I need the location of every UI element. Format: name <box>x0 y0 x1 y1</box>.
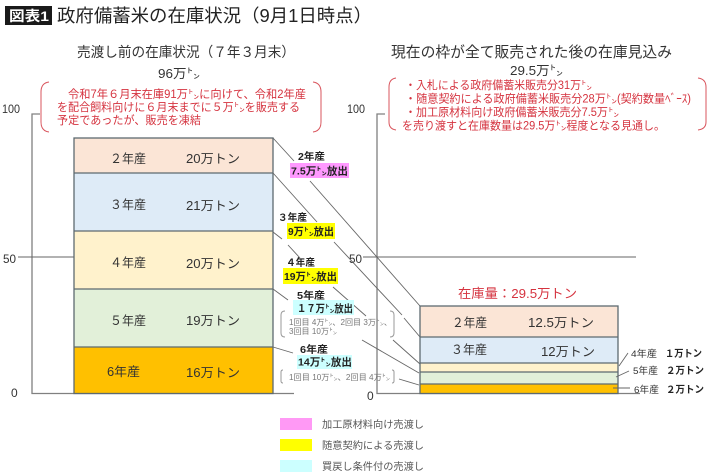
note: 6年産 release rounds <box>281 370 394 383</box>
callout: right note: ・加工原材料向け政府備蓄米販売分7.5万㌧ <box>405 105 619 119</box>
label: 5年産 release: 5年産 <box>297 289 325 302</box>
right side labels: １万トン <box>665 348 702 360</box>
callout: left note: 予定であったが、販売を凍結 <box>57 113 201 127</box>
right side labels: ２万トン <box>666 365 704 377</box>
right side labels: 4年産 <box>631 348 658 360</box>
right axis: 50 <box>349 252 362 266</box>
note: 5年産 release rounds: 1回目 4万㌧、2回目 3万㌧、 <box>289 318 392 327</box>
legend: 加工原材料向け売渡し <box>322 418 424 431</box>
stacked bar: before sale: ３年産 <box>110 198 146 212</box>
heading: right chart: 現在の枠が全て販売された後の在庫見込み <box>391 44 672 61</box>
label: 3年産 release: 9万㌧放出 <box>288 225 334 238</box>
stacked bar: before sale <box>74 138 273 394</box>
stacked bar: after sale: ２年産 <box>452 316 487 330</box>
right side labels: 5年産 <box>633 365 659 377</box>
left axis: 0 <box>11 386 18 400</box>
note: 5年産 release rounds <box>281 311 394 337</box>
callout: left note: を配合飼料向けに６月末までに５万㌧を販売する <box>57 100 300 114</box>
heading: left chart: 売渡し前の在庫状況（７年３月末） <box>77 44 295 60</box>
legend: 買戻し条件付の売渡し <box>322 460 424 473</box>
heading: right chart: 29.5万㌧ <box>510 63 563 78</box>
callout: right note: ・随意契約による政府備蓄米販売分28万㌧(契約数量ﾍﾞｰｽ) <box>405 92 691 106</box>
label: 4年産 release <box>283 256 338 284</box>
right side labels: 6年産 <box>634 384 660 396</box>
stacked bar: after sale: 12.5万トン <box>528 316 594 330</box>
right side labels: ２万トン <box>666 384 704 396</box>
label: 2年産 release <box>290 150 349 178</box>
stacked bar: after sale: 12万トン <box>541 345 595 359</box>
right axis: 0 <box>367 389 374 403</box>
legend: 随意契約による売渡し <box>322 439 424 452</box>
stacked bar: before sale: 20万トン <box>186 257 240 271</box>
left axis: 100 <box>2 102 20 116</box>
label: 3年産 release: ３年産 <box>278 211 307 224</box>
stacked bar: before sale: 21万トン <box>186 199 240 213</box>
stacked bar: before sale: ４年産 <box>110 256 146 270</box>
title: 図表1 <box>9 8 49 24</box>
label: 6年産 release <box>297 343 352 369</box>
stacked bar: before sale: 20万トン <box>186 152 240 166</box>
connector lines between stacks <box>273 138 420 385</box>
label: 4年産 release: 19万㌧放出 <box>284 270 337 283</box>
heading: left chart <box>77 44 295 81</box>
callout: left note <box>41 82 321 132</box>
label: 2年産 release: 7.5万㌧放出 <box>291 164 348 178</box>
label: 3年産 release <box>278 211 335 239</box>
stacked bar: before sale: 6年産 <box>107 365 140 379</box>
legend <box>280 418 424 473</box>
label: 4年産 release: ４年産 <box>286 256 315 269</box>
stacked bar: before sale: 16万トン <box>186 366 240 380</box>
stacked bar: before sale: ５年産 <box>110 314 146 328</box>
stacked bar: before sale: ２年産 <box>110 152 146 166</box>
heading: left chart: 96万㌧ <box>158 66 200 81</box>
callout: right note: を売り渡すと在庫数量は29.5万㌧程度となる見通し。 <box>402 118 665 132</box>
label: 5年産 release <box>293 289 354 315</box>
stacked bar: after sale: ３年産 <box>451 343 487 357</box>
label: 5年産 release: １７万㌧放出 <box>297 302 353 315</box>
left axis: 50 <box>3 252 16 266</box>
heading: right chart <box>391 44 672 78</box>
right axis <box>347 102 640 403</box>
note: 6年産 release rounds: 1回目 10万㌧、2回目 4万㌧ <box>289 373 390 382</box>
stacked bar: before sale: 19万トン <box>186 314 240 328</box>
stacked bar: after sale <box>420 306 618 394</box>
title: 政府備蓄米の在庫状況（9月1日時点） <box>57 6 372 26</box>
callout: right note <box>389 78 706 132</box>
label: 6年産 release: 14万㌧放出 <box>298 356 352 368</box>
stock total label: 在庫量：29.5万トン <box>458 286 577 301</box>
right side labels <box>613 348 704 396</box>
label: 2年産 release: 2年産 <box>298 150 325 163</box>
callout: left note: 令和7年６月末在庫91万㌧に向けて、令和2年産 <box>68 87 306 101</box>
note: 5年産 release rounds: 3回目 10万㌧ <box>289 327 337 336</box>
right axis: 100 <box>347 102 365 116</box>
left axis <box>2 102 294 400</box>
callout: right note: ・入札による政府備蓄米販売分31万㌧ <box>405 78 592 92</box>
label: 6年産 release: 6年産 <box>300 343 328 356</box>
